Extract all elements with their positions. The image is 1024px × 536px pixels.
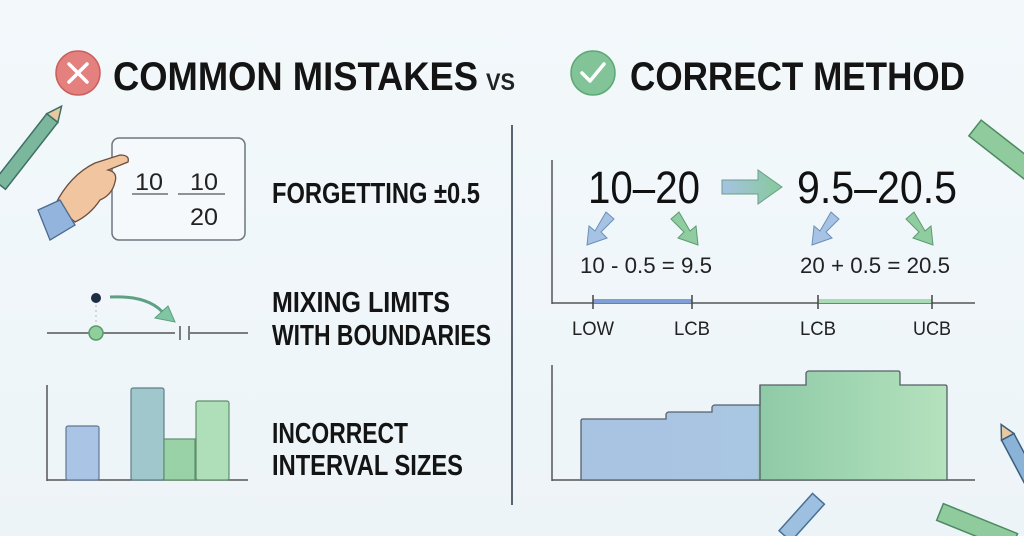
diagram: class boundaries: 20 + 0.5 = 20.5 xyxy=(800,253,950,278)
vs: VS xyxy=(486,69,515,96)
heading: common mistakes: COMMON MISTAKES xyxy=(113,55,478,99)
illustration: hand with fraction card: 10 xyxy=(135,169,163,196)
panel: common mistakes xyxy=(38,138,491,482)
icon: green check xyxy=(571,51,615,95)
decoration: pencil right xyxy=(995,421,1024,511)
decoration: ruler top-right xyxy=(969,120,1024,191)
diagram: class boundaries: 10–20 xyxy=(588,162,700,213)
label: mixing limits: MIXING LIMITS xyxy=(272,287,450,319)
decoration: pencil top-left xyxy=(0,102,67,189)
icon: red cross xyxy=(56,51,100,95)
decoration: rulers bottom xyxy=(779,493,1018,536)
diagram: class boundaries: 10 - 0.5 = 9.5 xyxy=(580,253,712,278)
title xyxy=(56,51,965,99)
diagram: class boundaries xyxy=(552,160,975,340)
diagram: class boundaries: LOW xyxy=(572,319,614,340)
divider xyxy=(511,125,513,505)
panel: common mistakes: INTERVAL SIZES xyxy=(272,450,463,482)
panel: common mistakes: WITH BOUNDARIES xyxy=(272,320,491,352)
illustration: hand with fraction card: 20 xyxy=(190,204,218,231)
illustration: number line limits xyxy=(47,293,248,340)
panel: correct method xyxy=(552,160,975,481)
small arrows xyxy=(587,212,933,245)
chart: uneven bars xyxy=(47,385,248,481)
diagram: class boundaries: UCB xyxy=(913,319,951,340)
label: forgetting: FORGETTING ±0.5 xyxy=(272,178,480,210)
heading: correct method: CORRECT METHOD xyxy=(630,55,965,99)
diagram: class boundaries: LCB xyxy=(674,319,710,340)
illustration: hand with fraction card xyxy=(38,138,245,240)
chart: correct histogram xyxy=(552,365,975,481)
diagram: class boundaries: LCB xyxy=(800,319,836,340)
label: incorrect interval sizes: INCORRECT xyxy=(272,418,408,450)
diagram: class boundaries: 9.5–20.5 xyxy=(797,162,957,213)
illustration: hand with fraction card: 10 xyxy=(190,169,218,196)
